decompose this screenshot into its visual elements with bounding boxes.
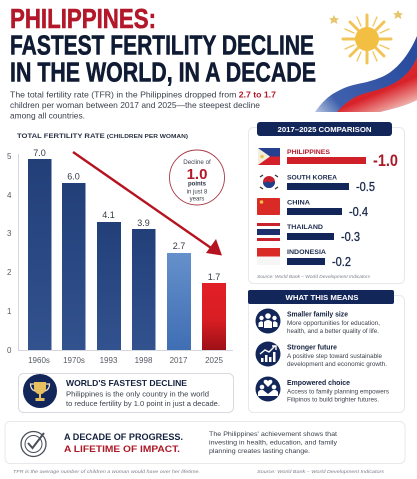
callout: decline of 1.0 points: points [188, 182, 207, 188]
item: stronger future: A positive step toward sustainable [287, 353, 383, 360]
bar chart: 3 [7, 229, 12, 238]
row: China [257, 198, 368, 219]
bar chart [7, 148, 233, 365]
bar chart: 2025 [205, 356, 223, 365]
panel: a decade of progress [5, 422, 405, 464]
title: IN THE WORLD, IN A DECADE [10, 56, 316, 88]
arrow: decline trend [73, 152, 222, 256]
item: empowered choice: Filipinos to build brighter futures. [287, 396, 379, 404]
intro text: among all countries. [10, 112, 85, 120]
item: empowered choice [256, 376, 389, 404]
bar chart: 1970s [63, 356, 85, 365]
flag ribbon with sun and stars [315, 10, 417, 112]
row: Indonesia [257, 248, 351, 269]
row: Thailand: -0.3 [341, 230, 360, 244]
bar chart: 4.1 [102, 210, 115, 220]
panel: world's fastest decline: WORLD'S FASTEST DECLINE [66, 379, 188, 388]
row: South Korea: SOUTH KOREA [287, 174, 337, 182]
source: Source: World Bank – World Development Indicators [257, 469, 385, 475]
icon: target check [21, 432, 46, 456]
panel: a decade of progress: The Philippines' achievement shows that [209, 431, 337, 438]
row: South Korea [260, 174, 375, 194]
row: Philippines [258, 148, 398, 170]
item: empowered choice: Empowered choice [287, 380, 350, 387]
bar chart: 0 [7, 346, 12, 355]
footnote: TFR is the average number of children a woman would have over her lifetime. [13, 469, 200, 475]
comparison heading: 2017–2025 COMPARISON [278, 125, 372, 134]
callout: decline of 1.0 points: 1.0 [187, 166, 207, 183]
source note: Source: World Bank – World Development Indicators [257, 274, 371, 279]
icon: trophy [23, 374, 57, 408]
intro text [10, 90, 276, 120]
panel: world's fastest decline: to reduce fertility by 1.0 point in just a decade. [66, 401, 220, 408]
bar chart: 3.9 [137, 218, 150, 228]
row: China: CHINA [287, 200, 311, 206]
bar chart: 5 [7, 152, 12, 161]
bar chart: 2 [7, 268, 12, 277]
callout: decline of 1.0 points [170, 150, 224, 205]
panel: a decade of progress: A LIFETIME OF IMPACT. [64, 444, 180, 454]
row: Thailand [257, 223, 360, 244]
bar chart: 1 [7, 307, 12, 316]
bar chart: 2.7 [173, 241, 185, 251]
item: smaller family size [256, 308, 380, 335]
item: stronger future [256, 342, 387, 368]
bar chart: 1998 [135, 356, 153, 365]
title: FASTEST FERTILITY DECLINE [10, 30, 314, 60]
bar chart: 1993 [100, 356, 118, 365]
callout: decline of 1.0 points: years [190, 196, 204, 202]
panel: a decade of progress: A DECADE OF PROGRESS. [64, 432, 183, 442]
what this means heading: WHAT THIS MEANS [286, 293, 359, 302]
row: China: -0.4 [349, 205, 368, 219]
bar chart: 4 [7, 191, 12, 200]
chart heading: TOTAL FERTILITY RATE (CHILDREN PER WOMAN) [17, 133, 188, 140]
panel: a decade of progress: planning creates lasting change. [209, 448, 310, 455]
comparison heading [257, 122, 392, 136]
bar chart: 6.0 [67, 172, 80, 182]
panel: world's fastest decline [18, 374, 234, 412]
bar chart: 2017 [170, 356, 188, 365]
item: empowered choice: Access to family planning empowers [287, 388, 389, 396]
bar chart: 7.0 [33, 148, 46, 158]
panel: 2017-2025 comparison [248, 122, 404, 284]
panel: world's fastest decline: Philippines is the only country in the world [66, 392, 209, 398]
panel: a decade of progress: investing in health, education, and family [209, 440, 338, 446]
row: Philippines: -1.0 [373, 152, 398, 170]
bar chart: 1.7 [208, 272, 220, 282]
row: Indonesia: -0.2 [332, 255, 351, 269]
item: smaller family size: Smaller family size [287, 312, 348, 318]
title [10, 3, 316, 88]
row: Indonesia: INDONESIA [287, 249, 326, 256]
title: PHILIPPINES: [10, 3, 156, 34]
item: stronger future: Stronger future [287, 344, 337, 352]
intro text: The total fertility rate (TFR) in the Philippines dropped from 2.7 to 1.7 [10, 90, 276, 100]
row: Thailand: THAILAND [287, 224, 323, 231]
callout: decline of 1.0 points: Decline of [183, 159, 211, 166]
row: Philippines: PHILIPPINES [287, 149, 330, 156]
item: smaller family size: More opportunities for education, [287, 320, 380, 327]
callout: decline of 1.0 points: in just 8 [187, 190, 208, 196]
bar chart: 1960s [28, 356, 50, 365]
row: South Korea: -0.5 [356, 180, 375, 194]
item: stronger future: development and economic growth. [287, 361, 387, 368]
item: smaller family size: health, and a better quality of life. [287, 328, 379, 335]
what this means heading [248, 290, 394, 304]
intro text: children per woman between 2017 and 2025—the steepest decline [10, 101, 260, 110]
panel: what this means [248, 290, 404, 412]
